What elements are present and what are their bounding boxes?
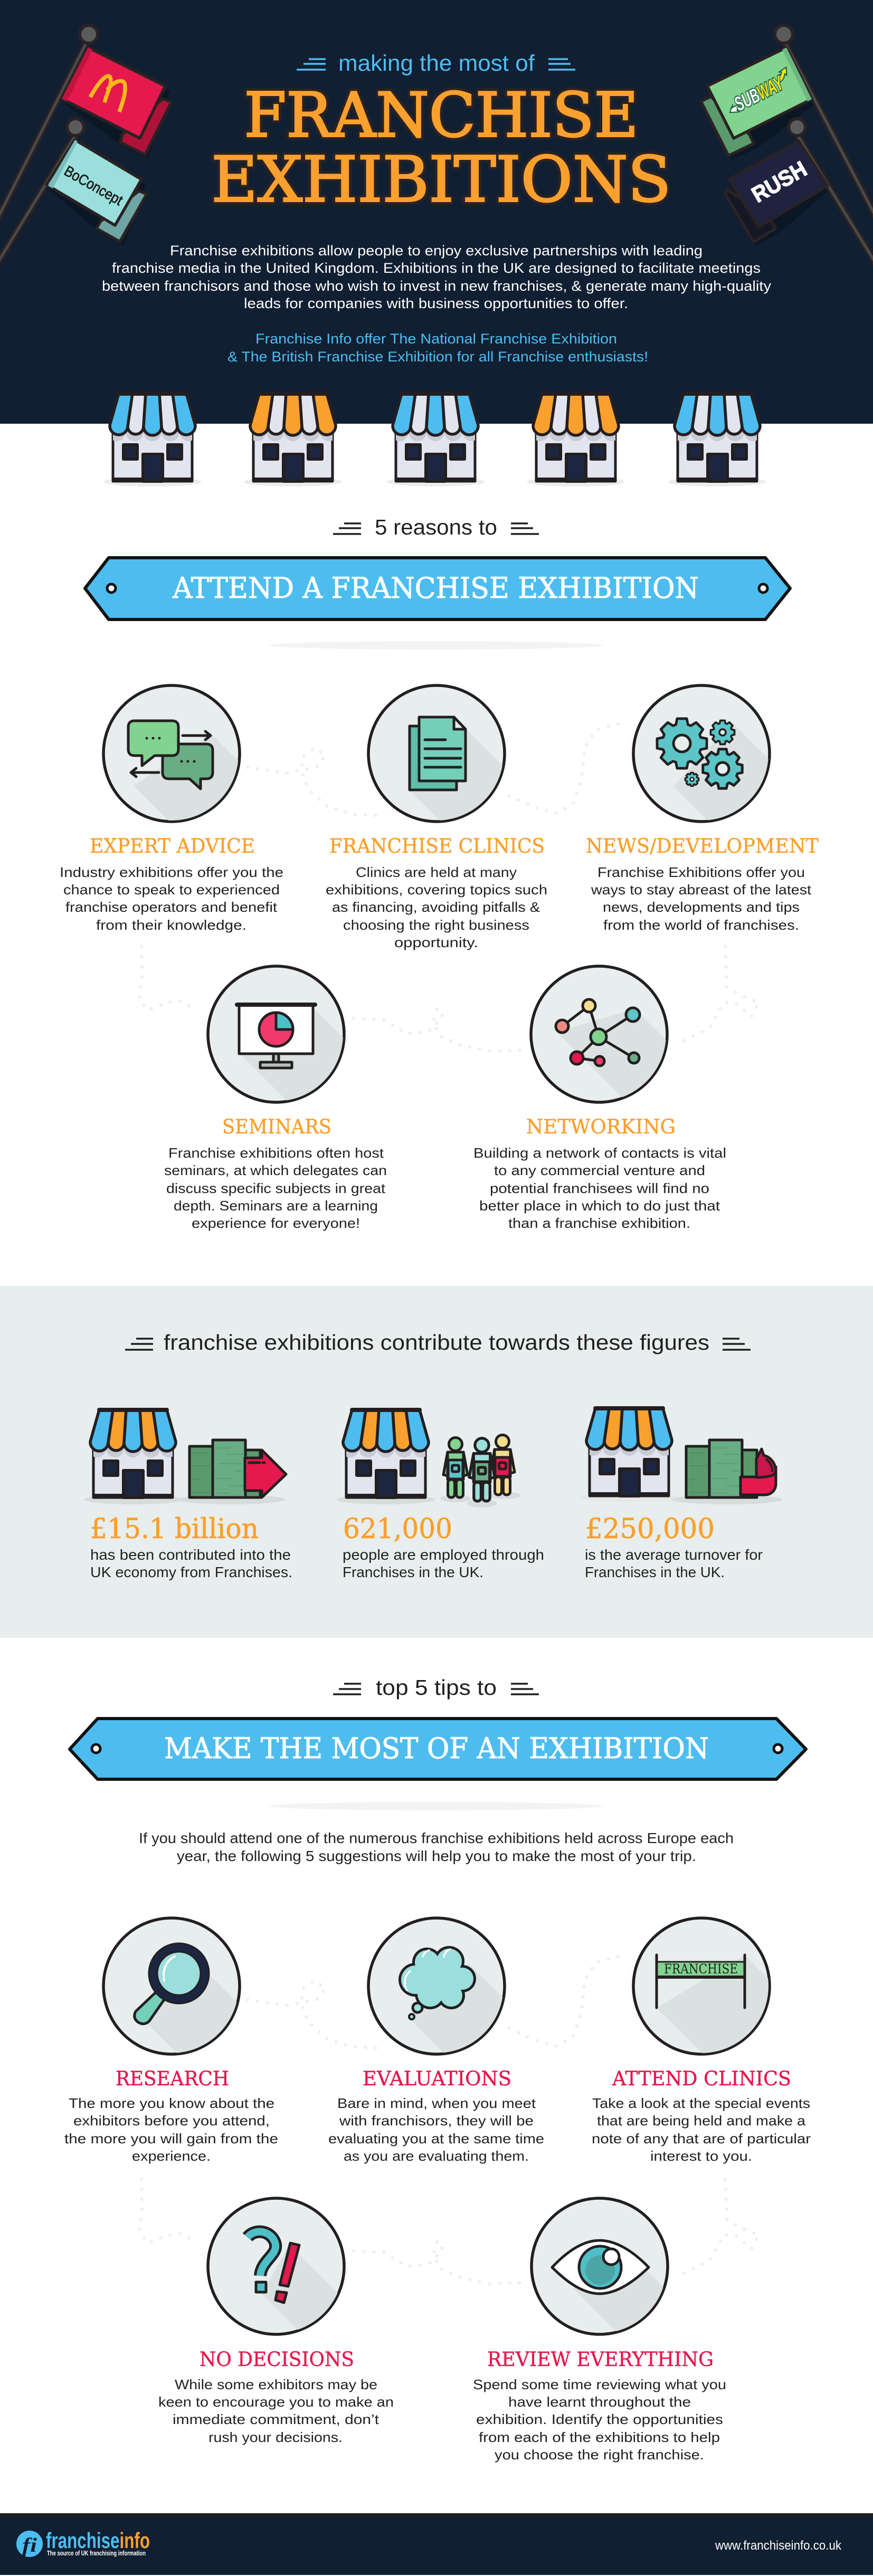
figure: shop and piggy bank [580,1408,782,1504]
description: from their knowledge. [96,917,246,933]
icon: Rush flag: RUSH [747,156,811,207]
icon: Subway flag: SUBWAY [731,72,788,116]
heading: making the most of: making the most of [338,51,535,76]
stat: 621,000: 621,000 [343,1513,452,1545]
icon: BoConcept flag: BoConcept [62,163,126,208]
text block: tips introduction [139,1830,734,1864]
description: that are being held and make a [597,2113,806,2129]
description: seminars, at which delegates can [164,1162,387,1178]
description: exhibitions, covering topics such [326,882,547,898]
stat: 250,000: £250,000 [585,1513,715,1545]
icon: presentation screen [206,965,346,1104]
row of shops [103,394,766,486]
text block: introduction: between franchisors and those who wish to invest in new franchises, & generate many high-quality [102,278,772,294]
panel: evaluations [329,1916,544,2163]
icon: magnifying glass [102,1916,241,2056]
text block: franchise info offer: & The British Franchise Exhibition for all Franchise enthusiasts! [227,349,648,365]
icon: Subway flag [701,25,873,222]
description: Bare in mind, when you meet [337,2095,536,2111]
panel: seminars [164,966,441,1231]
description: experience. [132,2148,211,2164]
icon: franchise banner [632,1916,771,2056]
panel: footer [0,2513,873,2575]
description [164,1145,387,1231]
heading: SEMINARS [222,1115,331,1138]
description: Franchise exhibitions often host [168,1145,384,1161]
description: ways to stay abreast of the latest [591,882,812,898]
text block: tips introduction: If you should attend one of the numerous franchise exhibitions held across Europe each [139,1830,734,1846]
description: note of any that are of particular [592,2131,811,2146]
heading: franchise exhibitions contribute: franchise exhibitions contribute towards these figures [164,1330,709,1354]
description: interest to you. [650,2148,752,2164]
text block: tips introduction: year, the following 5 suggestions will help you to make the most of your trip. [177,1848,696,1864]
icon: McDonald's flag [0,25,172,224]
website address: www.franchiseinfo.co.uk [715,2539,842,2553]
dotted connectors: reasons [139,722,758,1051]
description: Spend some time reviewing what you [473,2377,726,2392]
description: exhibition. Identify the opportunities [476,2411,723,2427]
logo: franchiseinfo: The source of UK franchising information [47,2550,146,2557]
stat: 15.1 billion: UK economy from Franchises. [90,1564,292,1580]
panel: expert advice [61,684,283,933]
text block: franchise info offer: Franchise Info offer The National Franchise Exhibition [255,331,617,347]
title: Franchise Exhibitions: EXHIBITIONS [211,144,671,216]
description: from the world of franchises. [603,917,799,933]
description: chance to speak to experienced [63,882,280,898]
stat: 621,000: Franchises in the UK. [343,1564,483,1580]
icon: franchise banner: FRANCHISE [664,1961,738,1977]
description: immediate commitment, don’t [173,2411,379,2427]
heading: 5 reasons to: 5 reasons to [375,515,497,539]
description: evaluating you at the same time [328,2131,544,2146]
description: Industry exhibitions offer you the [60,864,283,880]
heading: REVIEW EVERYTHING [487,2348,714,2371]
heading: NETWORKING [526,1115,676,1138]
description: with franchisors, they will be [339,2113,534,2129]
description: you choose the right franchise. [495,2447,704,2463]
icon: Rush flag [725,119,873,268]
description: choosing the right business [343,917,529,933]
stat: 621,000: people are employed through [343,1547,544,1563]
text block: introduction: franchise media in the United Kingdom. Exhibitions in the UK are designed to facilitate meetings [112,260,761,276]
description: to any commercial venture and [494,1162,705,1178]
description [591,864,812,933]
stat: 250,000: Franchises in the UK. [585,1564,725,1580]
icon: thought cloud [367,1916,506,2056]
description: potential franchisees will find no [490,1180,709,1196]
banner: attend a franchise exhibition [85,558,790,650]
icon: question and exclamation marks [206,2197,346,2336]
dotted connectors: tips [139,1954,758,2284]
banner: attend a franchise exhibition: ATTEND A FRANCHISE EXHIBITION [172,571,699,605]
description: depth. Seminars are a learning [174,1198,378,1214]
description: While some exhibitors may be [175,2377,377,2392]
panel: review everything [473,2198,750,2463]
description: exhibitors before you attend, [73,2113,270,2129]
description: The more you know about the [69,2095,274,2111]
heading: making the most of [297,51,575,76]
icon: BoConcept flag [0,119,147,268]
heading: RESEARCH [116,2067,229,2090]
panel: figures [0,1286,873,1638]
title: Franchise Exhibitions: FRANCHISE [244,80,639,151]
description: Clinics are held at many [356,864,517,880]
heading: NEWS/DEVELOPMENT [586,835,819,857]
title: Franchise Exhibitions: EXHIBITIONS [211,144,671,216]
description [473,2377,726,2463]
heading: FRANCHISE CLINICS [329,835,545,857]
stat: 15.1 billion [90,1513,292,1580]
stat: 15.1 billion: has been contributed into the [90,1547,291,1563]
heading: NO DECISIONS [200,2348,354,2371]
panel: franchise clinics [326,684,547,950]
description: than a franchise exhibition. [508,1215,690,1231]
description [328,2095,544,2164]
panel: no decisions [158,2198,416,2445]
heading: top 5 tips to [333,1675,539,1700]
description: opportunity. [394,934,478,950]
icon: documents [367,684,506,823]
icon: eye [530,2197,669,2336]
text block: introduction: Franchise exhibitions allow people to enjoy exclusive partnerships with leading [170,243,703,259]
description [64,2095,278,2164]
panel: networking [475,965,725,1228]
figure: shop and people [337,1410,520,1508]
description: better place in which to do just that [479,1198,720,1214]
description: keen to encourage you to make an [158,2394,394,2410]
stat: 621,000 [343,1513,544,1580]
banner: make the most of an exhibition: MAKE THE MOST OF AN EXHIBITION [164,1732,709,1765]
heading: ATTEND CLINICS [612,2067,791,2090]
description: as you are evaluating them. [344,2148,529,2164]
title: Franchise Exhibitions: FRANCHISE [244,80,639,151]
banner: make the most of an exhibition [70,1719,806,1810]
text block: franchise info offer [227,331,648,365]
heading: top 5 tips to: top 5 tips to [376,1675,497,1700]
figure: shop and money arrow [84,1410,286,1504]
description [60,864,283,933]
description: rush your decisions. [208,2429,343,2445]
description: news, developments and tips [603,899,800,915]
logo: franchiseinfo [16,2528,150,2557]
title: Franchise Exhibitions [211,80,671,216]
description: Building a network of contacts is vital [473,1145,726,1161]
panel: research [64,1916,278,2163]
description [473,1145,726,1231]
description: experience for everyone! [192,1215,360,1231]
panel: news and development [587,684,819,930]
description [158,2377,394,2445]
description: as financing, avoiding pitfalls & [332,899,540,915]
stat: 15.1 billion: £15.1 billion [90,1513,259,1545]
heading: EXPERT ADVICE [90,835,255,857]
description: discuss specific subjects in great [166,1180,386,1196]
description: the more you will gain from the [64,2131,278,2146]
description: have learnt throughout the [508,2394,691,2410]
description [592,2095,811,2164]
icon: network nodes [529,965,669,1104]
stat: 250,000 [585,1513,763,1580]
panel: attend clinics [592,1916,811,2163]
description: Franchise Exhibitions offer you [597,864,805,880]
heading: 5 reasons to [333,515,539,539]
text block: introduction [102,243,772,311]
description [326,864,547,950]
description: franchise operators and benefit [65,899,278,915]
description: Take a look at the special events [592,2095,810,2111]
icon: gears [632,684,771,823]
heading: EVALUATIONS [363,2067,511,2090]
text block: introduction: leads for companies with business opportunities to offer. [244,295,628,311]
description: from each of the exhibitions to help [479,2429,720,2445]
logo: franchiseinfo: franchiseinfo [46,2528,150,2553]
stat: 250,000: is the average turnover for [585,1547,763,1563]
icon: speech bubbles [102,684,241,823]
panel: header background [0,0,873,424]
logo: franchiseinfo: fi [22,2534,37,2556]
